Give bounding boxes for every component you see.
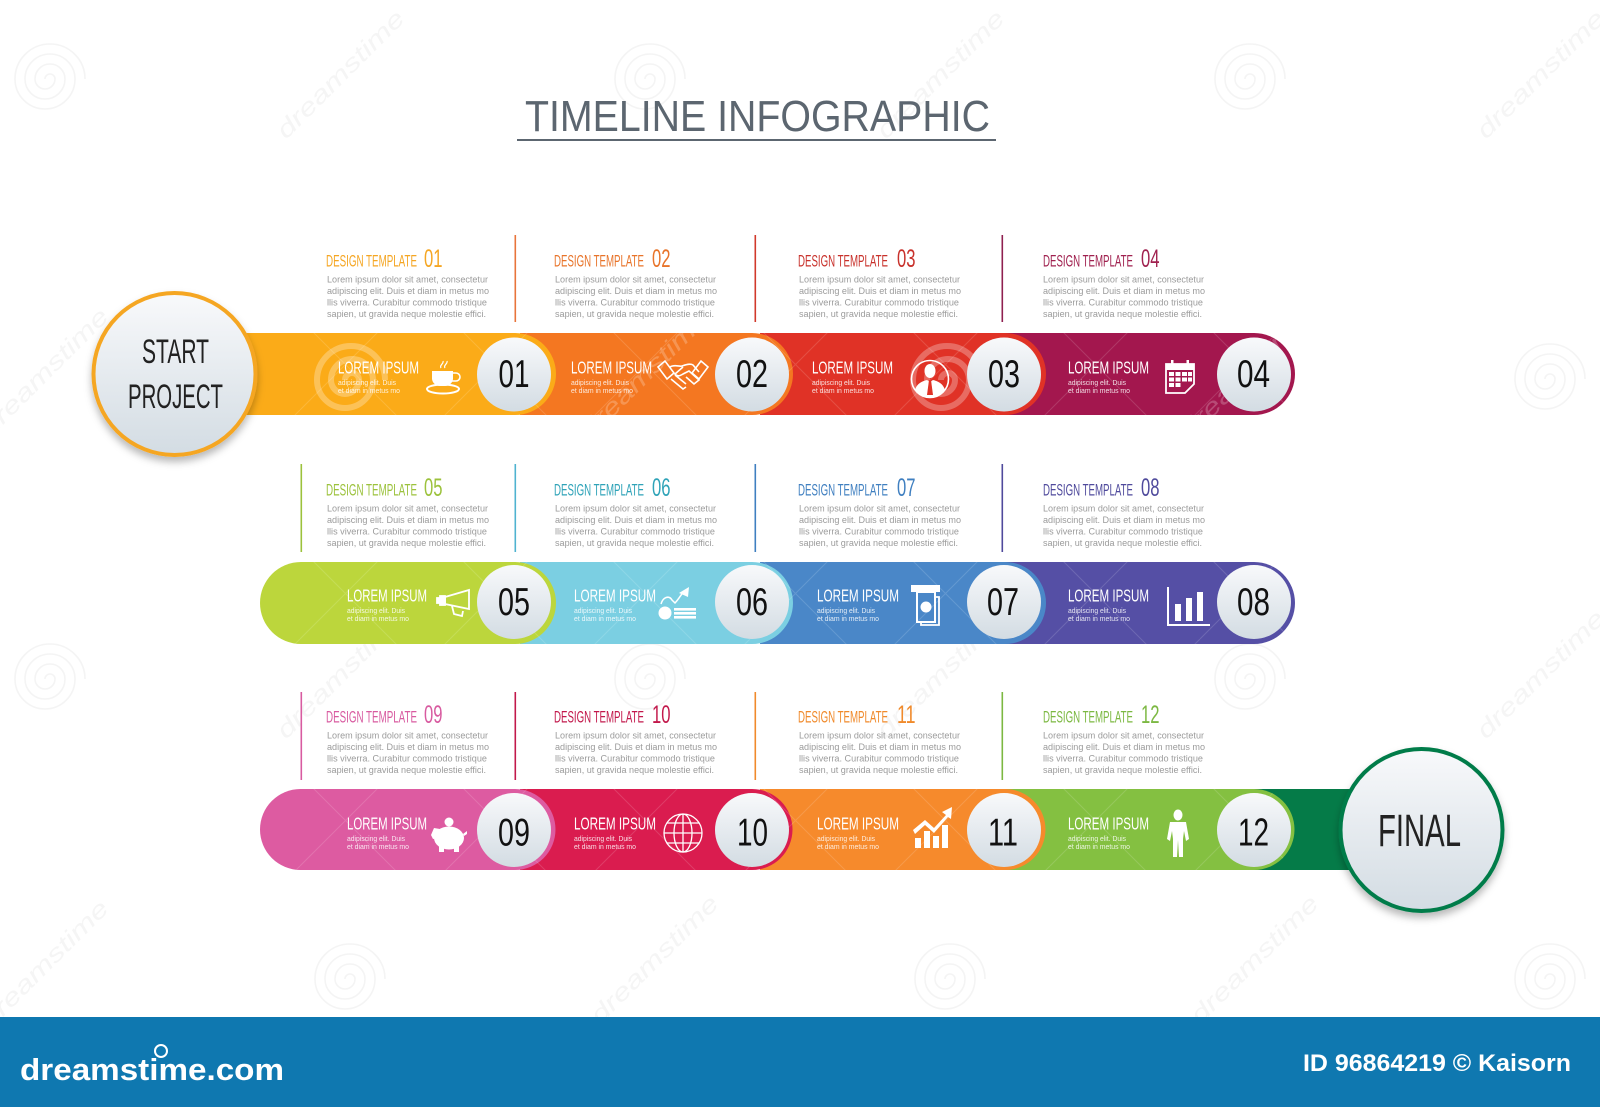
number badge 09 (477, 793, 551, 867)
panel: details 09 (300, 692, 489, 780)
panel: details 10: DESIGN TEMPLATE (554, 708, 644, 726)
watermark: background spirals and diagonal marks: dreamstime (1471, 5, 1600, 144)
panel: details 05: 05 (424, 474, 442, 502)
icon: globe (664, 814, 702, 852)
panel: details 06: sapien, ut gravida neque molestie effici. (555, 538, 714, 549)
title: TIMELINE INFOGRAPHIC (525, 92, 990, 141)
bar label 08: adipiscing elit. Duis (1068, 606, 1126, 615)
bar label 12: et diam in metus mo (1068, 842, 1130, 851)
number badge 07: 07 (987, 581, 1019, 624)
bar label 04: LOREM IPSUM (1068, 358, 1149, 378)
panel: details 01: llis viverra. Curabitur commodo tristique (327, 298, 487, 308)
bar label 01: adipiscing elit. Duis (338, 378, 396, 387)
panel: details 03: 03 (897, 245, 916, 273)
bar label 06: LOREM IPSUM (574, 586, 656, 606)
panel: details 09: 09 (424, 701, 442, 729)
panel: details 12: sapien, ut gravida neque molestie effici. (1043, 765, 1202, 776)
icon: coin and growth arrow (658, 587, 696, 620)
panel: details 03: Lorem ipsum dolor sit amet, consectetur (799, 274, 961, 286)
bar label 01: et diam in metus mo (338, 386, 400, 395)
bar label 12: LOREM IPSUM (1068, 814, 1149, 834)
panel: details 05: DESIGN TEMPLATE (326, 482, 417, 500)
panel: details 06 (514, 464, 717, 552)
bar label 05: LOREM IPSUM (347, 586, 427, 606)
number badge 11 (967, 793, 1041, 867)
panel: details 01 (326, 245, 489, 320)
icon: businessman (1167, 810, 1189, 857)
icon: businessman in circle (912, 360, 948, 398)
final circle (1340, 749, 1502, 911)
watermark: background spirals and diagonal marks: dreamstime (871, 5, 1010, 144)
panel: details 08: adipiscing elit. Duis et diam in metus mo (1043, 515, 1205, 526)
panel: details 03: DESIGN TEMPLATE (798, 252, 888, 270)
bar label 10 (574, 814, 656, 851)
panel: details 03 (754, 235, 961, 322)
bar label 02: et diam in metus mo (571, 386, 633, 395)
panel: details 01: sapien, ut gravida neque molestie effici. (327, 309, 486, 320)
panel: details 07: 07 (897, 474, 916, 502)
panel: details 07: sapien, ut gravida neque molestie effici. (799, 538, 958, 549)
panel: details 07 (754, 464, 961, 552)
bar label 03: adipiscing elit. Duis (812, 378, 870, 387)
bar label 08 (1068, 586, 1149, 623)
number badge 01 (477, 338, 551, 412)
number badge 09: 09 (498, 812, 530, 854)
panel: details 01: Lorem ipsum dolor sit amet, consectetur (327, 274, 489, 286)
panel: details 08: DESIGN TEMPLATE (1043, 482, 1133, 500)
panel: details 12: 12 (1141, 701, 1160, 729)
panel: details 05: adipiscing elit. Duis et diam in metus mo (327, 515, 489, 526)
panel: details 05: Lorem ipsum dolor sit amet, consectetur (327, 504, 489, 514)
panel: details 12: adipiscing elit. Duis et diam in metus mo (1043, 742, 1205, 753)
panel: details 12: llis viverra. Curabitur commodo tristique (1043, 754, 1203, 764)
panel: details 07: adipiscing elit. Duis et diam in metus mo (799, 515, 961, 526)
panel: details 06: DESIGN TEMPLATE (554, 482, 644, 500)
number badge 05 (477, 565, 551, 639)
bar label 11 (817, 814, 899, 851)
bar label 09: adipiscing elit. Duis (347, 834, 405, 843)
icon: cash machine (911, 585, 940, 625)
panel: details 11: llis viverra. Curabitur commodo tristique (799, 754, 959, 764)
panel: details 01: DESIGN TEMPLATE (326, 252, 417, 270)
panel: details 04: 04 (1141, 245, 1160, 273)
bar label 12 (1068, 814, 1149, 851)
watermark: background spirals and diagonal marks: dreamstime (1185, 890, 1324, 1029)
number badge 07 (967, 565, 1041, 639)
bar label 03: et diam in metus mo (812, 386, 874, 395)
watermark: background spirals and diagonal marks: dreamstime (271, 605, 410, 744)
panel: details 06: adipiscing elit. Duis et diam in metus mo (555, 515, 717, 526)
footer band (0, 1017, 1600, 1107)
number badge 03: 03 (988, 353, 1020, 396)
start project circle: PROJECT (128, 378, 223, 416)
panel: details 02: llis viverra. Curabitur commodo tristique (555, 298, 715, 308)
panel: details 04: Lorem ipsum dolor sit amet, consectetur (1043, 274, 1205, 286)
bar label 01 (338, 358, 419, 395)
start project circle: START (142, 333, 209, 371)
number badge 06: 06 (736, 581, 768, 624)
panel: bar segments 05 to 08 (260, 562, 1295, 644)
panel: details 11: adipiscing elit. Duis et diam in metus mo (799, 742, 961, 753)
bar label 04 (1068, 358, 1149, 395)
watermark: background spirals and diagonal marks: dreamstime (1471, 605, 1600, 744)
bar label 02: adipiscing elit. Duis (571, 378, 629, 387)
bar label 07: et diam in metus mo (817, 614, 879, 623)
number badge 04 (1217, 338, 1291, 412)
panel: details 12: DESIGN TEMPLATE (1043, 708, 1133, 726)
panel: details 10: llis viverra. Curabitur commodo tristique (555, 754, 715, 764)
panel: details 06: Lorem ipsum dolor sit amet, consectetur (555, 504, 717, 514)
panel: details 11 (754, 692, 961, 780)
bar label 02: LOREM IPSUM (571, 358, 652, 378)
panel: details 11: 11 (897, 701, 916, 729)
bar label 10: adipiscing elit. Duis (574, 834, 632, 843)
number badge 06 (715, 565, 789, 639)
footer image id: ID 96864219 © Kaisorn (1303, 1050, 1571, 1077)
panel: details 10: sapien, ut gravida neque molestie effici. (555, 765, 714, 776)
panel: details 12 (1002, 692, 1205, 780)
number badge 08: 08 (1237, 581, 1270, 624)
panel: details 10: 10 (652, 701, 670, 729)
panel: details 04: adipiscing elit. Duis et diam in metus mo (1043, 286, 1205, 297)
start project circle (94, 293, 256, 455)
watermark: background spirals and diagonal marks: dreamstime (871, 605, 1010, 744)
icon: coffee cup (427, 361, 460, 394)
panel: details 04: llis viverra. Curabitur commodo tristique (1043, 298, 1203, 308)
panel: details 03: llis viverra. Curabitur commodo tristique (799, 298, 959, 308)
bar label 09: LOREM IPSUM (347, 814, 427, 834)
bar label 01: LOREM IPSUM (338, 358, 419, 378)
bar label 06 (574, 586, 656, 623)
row 1: steps 01 to 04 (94, 235, 1314, 455)
panel: details 11: sapien, ut gravida neque molestie effici. (799, 765, 958, 776)
number badge 12: 12 (1238, 812, 1269, 854)
panel: details 10 (514, 692, 717, 780)
panel: details 06: llis viverra. Curabitur commodo tristique (555, 526, 715, 538)
bar label 07 (817, 586, 899, 623)
bar label 08: LOREM IPSUM (1068, 586, 1149, 606)
panel: details 04: DESIGN TEMPLATE (1043, 252, 1133, 270)
bar label 10: LOREM IPSUM (574, 814, 656, 834)
panel: bar segments 01 to 04: dreamstime (1175, 305, 1314, 444)
panel: bar segments 01 to 04: dreamstime (575, 305, 714, 444)
panel: bar segments 01 to 04 (174, 305, 1314, 444)
icon: handshake (658, 361, 708, 389)
bar label 04: adipiscing elit. Duis (1068, 378, 1126, 387)
bar label 10: et diam in metus mo (574, 842, 636, 851)
panel: details 05: sapien, ut gravida neque molestie effici. (327, 538, 486, 549)
panel: details 09: Lorem ipsum dolor sit amet, consectetur (327, 730, 489, 742)
number badge 08 (1217, 565, 1291, 639)
panel: details 01: 01 (424, 245, 442, 273)
bar label 05: et diam in metus mo (347, 614, 409, 623)
bar label 06: et diam in metus mo (574, 614, 636, 623)
icon: megaphone (437, 590, 469, 616)
panel: details 04: sapien, ut gravida neque molestie effici. (1043, 309, 1202, 320)
panel: details 10: adipiscing elit. Duis et diam in metus mo (555, 742, 717, 753)
bar label 06: adipiscing elit. Duis (574, 606, 632, 615)
panel: details 02: Lorem ipsum dolor sit amet, consectetur (555, 274, 717, 286)
watermark: background spirals and diagonal marks: dreamstime (585, 890, 724, 1029)
panel: details 11: Lorem ipsum dolor sit amet, consectetur (799, 730, 961, 742)
bar label 12: adipiscing elit. Duis (1068, 834, 1126, 843)
number badge 01: 01 (498, 353, 530, 396)
number badge 02: 02 (736, 353, 768, 396)
panel: details 08: llis viverra. Curabitur commodo tristique (1043, 526, 1203, 538)
panel: details 07: Lorem ipsum dolor sit amet, consectetur (799, 504, 961, 514)
bar label 04: et diam in metus mo (1068, 386, 1130, 395)
panel: details 11: DESIGN TEMPLATE (798, 708, 888, 726)
final circle: FINAL (1378, 805, 1461, 856)
panel: details 08: sapien, ut gravida neque molestie effici. (1043, 538, 1202, 549)
bar label 02 (571, 358, 652, 395)
bar label 07: LOREM IPSUM (817, 586, 899, 606)
panel: details 03: adipiscing elit. Duis et diam in metus mo (799, 286, 961, 297)
panel: details 02: 02 (652, 245, 670, 273)
panel: details 08: 08 (1141, 474, 1160, 502)
panel: details 12: Lorem ipsum dolor sit amet, consectetur (1043, 730, 1205, 742)
row 2: steps 05 to 08 (260, 464, 1295, 644)
panel: details 02 (514, 235, 717, 322)
bar label 11: LOREM IPSUM (817, 814, 899, 834)
panel: details 02: adipiscing elit. Duis et diam in metus mo (555, 286, 717, 297)
bar label 03: LOREM IPSUM (812, 358, 893, 378)
number badge 02 (715, 338, 789, 412)
bar label 08: et diam in metus mo (1068, 614, 1130, 623)
panel: details 09: DESIGN TEMPLATE (326, 708, 417, 726)
footer logo: dreamstime.com (20, 1052, 284, 1087)
panel: details 09: sapien, ut gravida neque molestie effici. (327, 765, 486, 776)
panel: details 04 (1002, 235, 1205, 322)
panel: details 03: sapien, ut gravida neque molestie effici. (799, 309, 958, 320)
panel: details 07: llis viverra. Curabitur commodo tristique (799, 526, 959, 538)
number badge 04: 04 (1237, 353, 1270, 396)
number badge 03 (967, 338, 1041, 412)
icon: bar chart (1167, 587, 1210, 626)
bar label 11: adipiscing elit. Duis (817, 834, 875, 843)
bar label 05 (347, 586, 427, 623)
icon: calendar (1166, 360, 1194, 393)
number badge 11: 11 (988, 812, 1018, 854)
icon: piggy bank (431, 818, 467, 852)
number badge 12 (1217, 793, 1291, 867)
bar label 07: adipiscing elit. Duis (817, 606, 875, 615)
panel: bar segments 09 to 12 (260, 789, 1370, 870)
panel: details 07: DESIGN TEMPLATE (798, 482, 888, 500)
bar label 05: adipiscing elit. Duis (347, 606, 405, 615)
panel: details 05: llis viverra. Curabitur commodo tristique (327, 526, 487, 538)
panel: details 08: Lorem ipsum dolor sit amet, consectetur (1043, 504, 1205, 514)
panel: details 09: llis viverra. Curabitur commodo tristique (327, 754, 487, 764)
bar label 11: et diam in metus mo (817, 842, 879, 851)
bar label 03 (812, 358, 893, 395)
watermark: background spirals and diagonal marks: dreamstime (271, 5, 410, 144)
number badge 05: 05 (498, 581, 530, 624)
icon: growth chart arrow (913, 807, 952, 848)
panel: details 08 (1002, 464, 1205, 552)
bar label 09 (347, 814, 427, 851)
panel: details 10: Lorem ipsum dolor sit amet, consectetur (555, 730, 717, 742)
panel: details 02: sapien, ut gravida neque molestie effici. (555, 309, 714, 320)
number badge 10: 10 (737, 812, 768, 854)
bar label 09: et diam in metus mo (347, 842, 409, 851)
panel: details 02: DESIGN TEMPLATE (554, 252, 644, 270)
panel: details 05 (300, 464, 489, 552)
number badge 10 (715, 793, 789, 867)
panel: details 06: 06 (652, 474, 670, 502)
panel: details 09: adipiscing elit. Duis et diam in metus mo (327, 742, 489, 753)
row 3: steps 09 to 12 (260, 692, 1502, 911)
panel: details 01: adipiscing elit. Duis et diam in metus mo (327, 286, 489, 297)
